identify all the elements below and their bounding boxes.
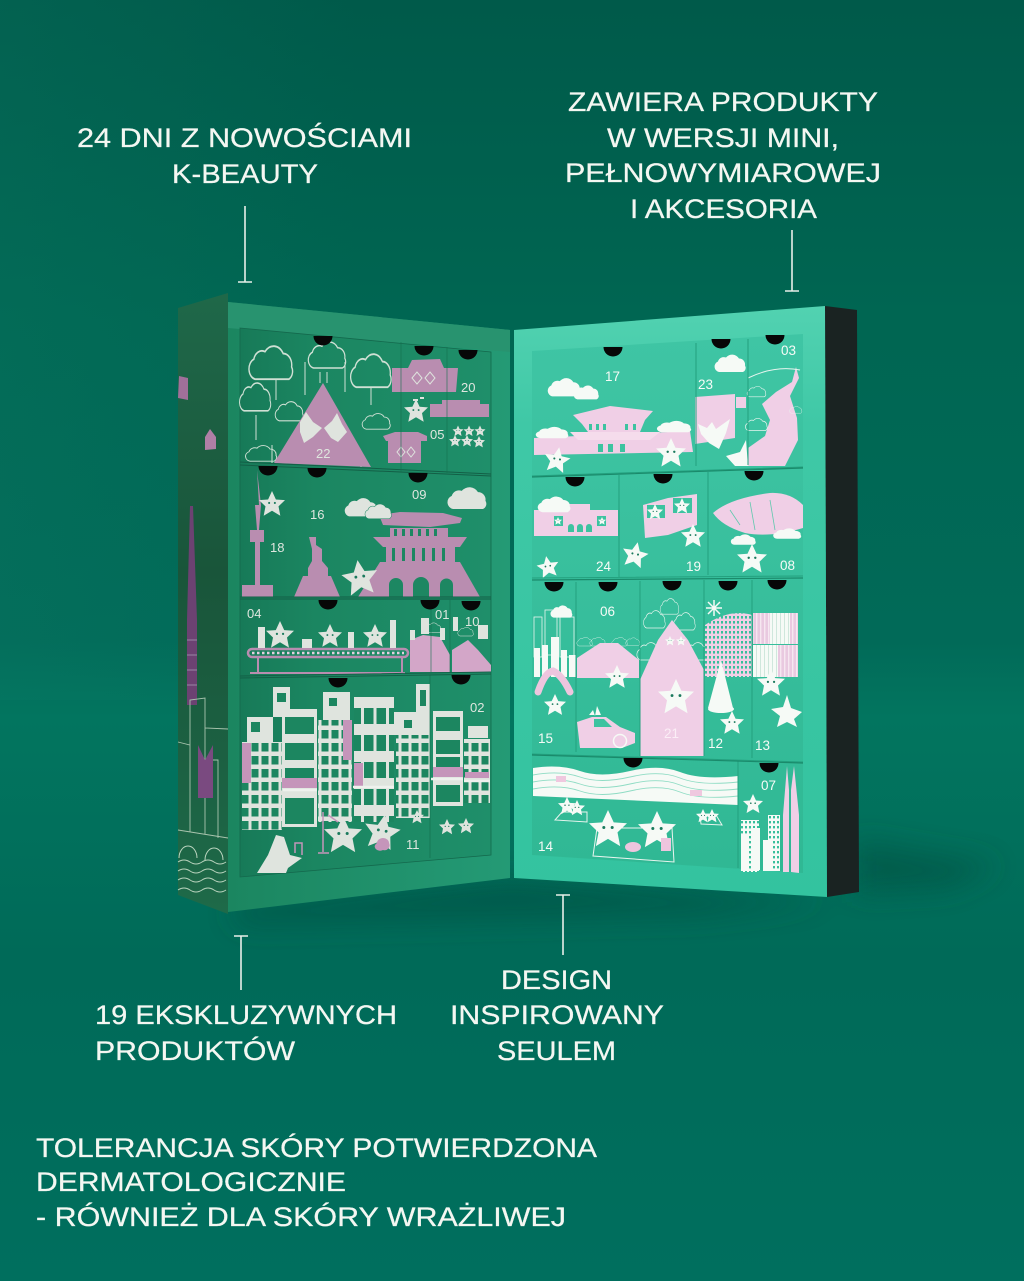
drawer row 3	[534, 599, 802, 756]
drawer row 3	[247, 606, 491, 673]
heading: product versions: W WERSJI MINI,	[607, 123, 839, 153]
drawer row 1: 05	[430, 427, 444, 442]
floor shadow	[230, 840, 1000, 925]
heading: exclusive products: PRODUKTÓW	[95, 1035, 296, 1066]
heading: 24 days: 24 DNI Z NOWOŚCIAMI	[77, 121, 412, 153]
drawer row 2: 08	[780, 558, 795, 573]
pointer: bottom right	[556, 895, 570, 955]
drawer row 3: 12	[708, 736, 723, 751]
calendar box: left door	[178, 293, 510, 914]
drawer row 1: 22	[316, 446, 330, 461]
heading: design: INSPIROWANY	[450, 1000, 664, 1030]
pointer: top right	[785, 230, 799, 291]
drawer row 1: 17	[605, 369, 620, 384]
drawer row 3: 01	[435, 607, 449, 622]
heading: 24 days	[77, 121, 412, 189]
door frame	[228, 302, 510, 912]
drawer row 3: 10	[465, 614, 479, 629]
note: dermatological tolerance: TOLERANCJA SKÓRY POTWIERDZONA	[36, 1132, 597, 1163]
drawer row 3: 13	[755, 738, 770, 753]
drawer tray	[240, 328, 491, 877]
drawer row 2	[534, 493, 803, 579]
pointer: top left	[238, 206, 252, 282]
drawer dividers and notches	[240, 336, 491, 688]
background side glow	[0, 0, 1024, 700]
heading: design: SEULEM	[497, 1036, 616, 1066]
drawer row 4: 14	[538, 839, 554, 854]
heading: product versions: PEŁNOWYMIAROWEJ	[565, 158, 881, 188]
heading: product versions	[565, 87, 881, 224]
drawer row 3: 15	[538, 731, 553, 746]
heading: design	[450, 965, 664, 1066]
drawer row 1	[534, 343, 802, 474]
drawer row 2: 19	[686, 559, 701, 574]
drawer row 1: 03	[781, 343, 796, 358]
drawer tray	[532, 334, 803, 873]
drawer row 2: 24	[596, 559, 612, 574]
calendar box: right door	[514, 306, 859, 897]
drawer row 4	[533, 766, 799, 873]
drawer row 3: 21	[664, 726, 679, 741]
heading: exclusive products	[95, 1000, 397, 1066]
drawer row 4: 07	[761, 778, 776, 793]
drawer row 2: 16	[310, 507, 324, 522]
note: dermatological tolerance	[36, 1132, 597, 1232]
drawer row 4: street of buildings: 11	[406, 837, 420, 852]
spine	[178, 293, 228, 914]
drawer row 1: 20	[461, 380, 475, 395]
drawer row 1	[240, 342, 489, 467]
drawer row 4: street of buildings	[242, 675, 490, 873]
door frame	[514, 306, 827, 897]
drawer dividers and notches	[532, 335, 803, 868]
note: dermatological tolerance: - RÓWNIEŻ DLA SKÓRY WRAŻLIWEJ	[36, 1201, 566, 1232]
heading: design: DESIGN	[501, 965, 612, 995]
heading: product versions: ZAWIERA PRODUKTY	[568, 87, 878, 117]
black outer side	[825, 306, 859, 897]
drawer row 3: 06	[600, 604, 615, 619]
drawer row 3: 04	[247, 606, 261, 621]
pointer: bottom left	[234, 936, 248, 990]
drawer row 1: 23	[698, 377, 713, 392]
heading: 24 days: K-BEAUTY	[172, 159, 318, 189]
drawer row 2: 09	[412, 487, 426, 502]
heading: product versions: I AKCESORIA	[630, 194, 817, 224]
heading: exclusive products: 19 EKSKLUZYWNYCH	[95, 1000, 397, 1030]
drawer row 2	[242, 470, 486, 597]
drawer row 4: street of buildings: 02	[470, 700, 484, 715]
note: dermatological tolerance: DERMATOLOGICZNIE	[36, 1167, 346, 1197]
drawer row 2: 18	[270, 540, 284, 555]
